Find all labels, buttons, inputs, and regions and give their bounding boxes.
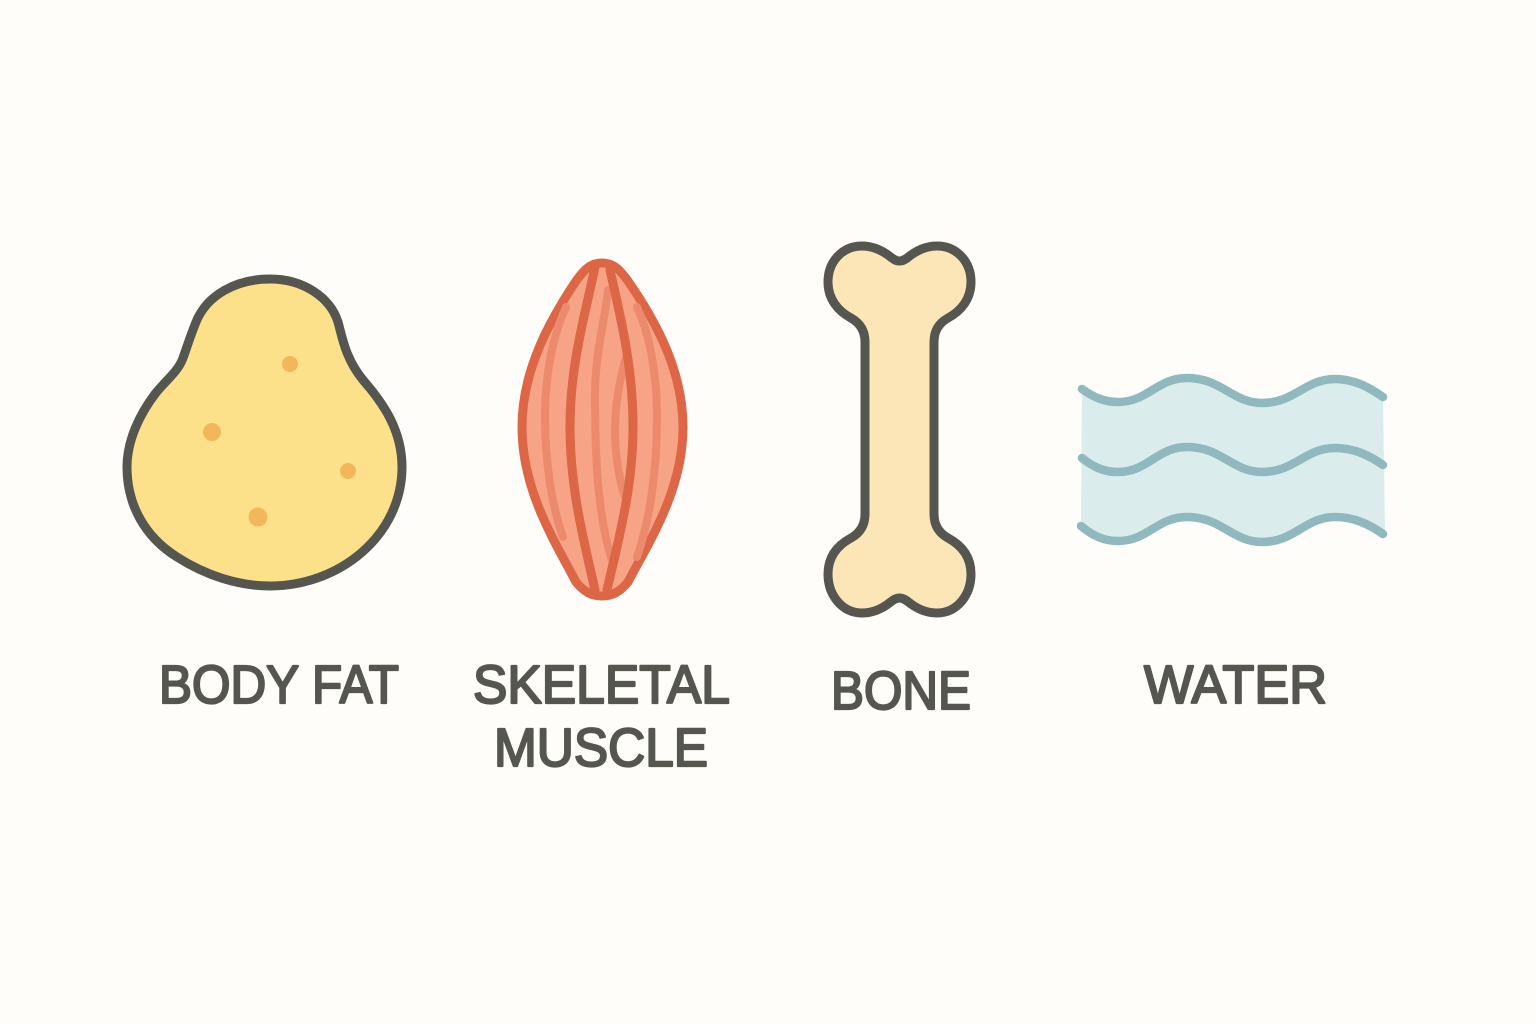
icon: bone <box>828 246 971 613</box>
icon: muscle <box>522 263 683 596</box>
label: water: WATER <box>1144 655 1327 715</box>
panel: water <box>1081 378 1385 715</box>
label: skeletal muscle: MUSCLE <box>494 718 708 778</box>
label: body fat: BODY FAT <box>159 655 399 715</box>
icon: body fat blob <box>127 279 402 586</box>
panel: bone <box>828 246 971 721</box>
panel: skeletal muscle <box>473 263 730 778</box>
panel: body fat <box>127 279 402 715</box>
label: skeletal muscle: SKELETAL <box>473 655 730 715</box>
label: bone: BONE <box>831 661 971 721</box>
label: skeletal muscle <box>473 655 730 778</box>
icon: water waves <box>1081 378 1385 542</box>
